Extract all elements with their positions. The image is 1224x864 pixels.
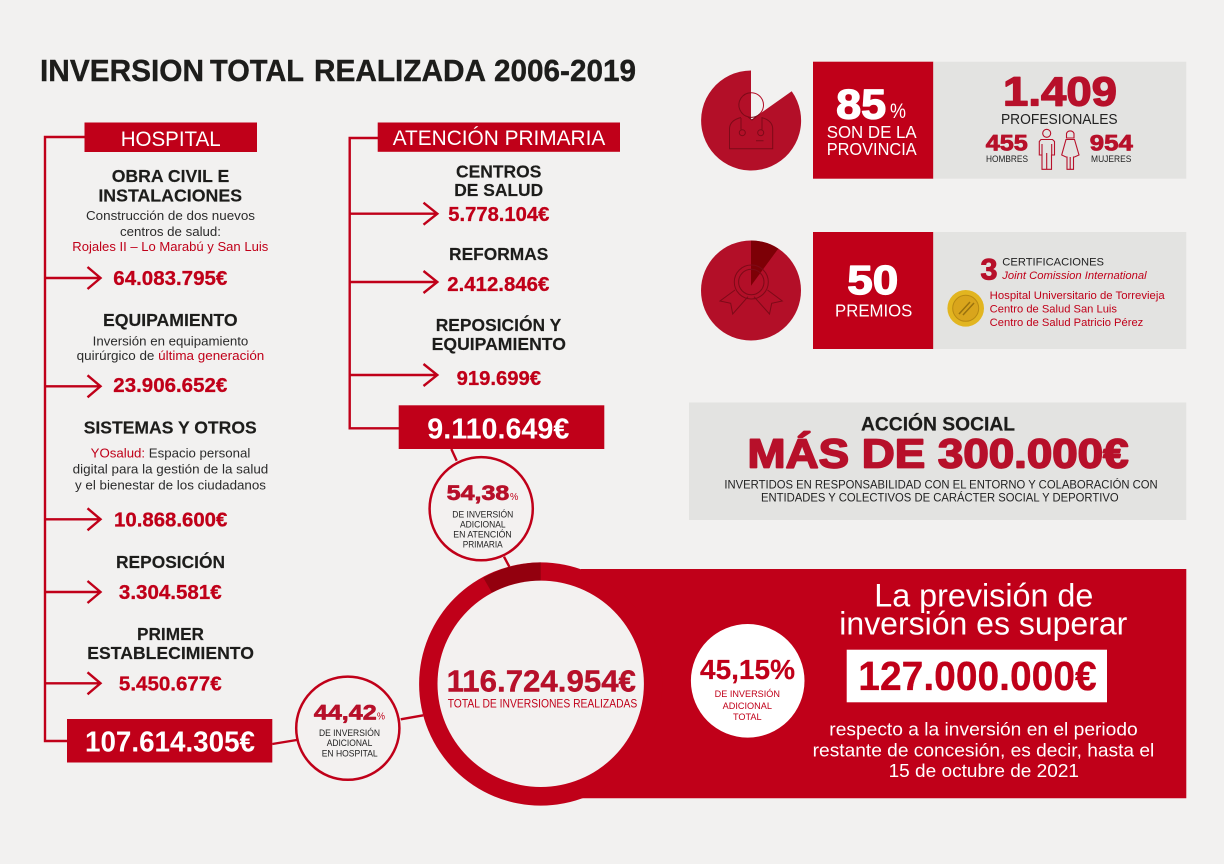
value: equipamiento: 23.906.652€ (113, 374, 228, 397)
85% box (813, 62, 933, 179)
hospital total: 107.614.305€ (85, 727, 255, 759)
callout: 54,38% atención primaria: PRIMARIA (463, 539, 503, 549)
total value: TOTAL DE INVERSIONES REALIZADAS (448, 698, 638, 710)
text: obra civil: centros de salud: (120, 224, 221, 239)
title: INVERSION (40, 53, 204, 88)
hospital heading (84, 122, 257, 152)
total value: 116.724.954€ (447, 664, 636, 699)
title (40, 53, 636, 88)
panel: acción social (689, 402, 1186, 520)
text: reposición: REPOSICIÓN (116, 551, 225, 572)
85% box: PROVINCIA (827, 139, 917, 159)
text: primer establecimiento: ESTABLECIMIENTO (87, 643, 254, 663)
callout: 44,42% hospital: ADICIONAL (327, 738, 372, 748)
panel: atención primaria (350, 122, 620, 449)
text: sistemas y otros: digital para la gestión de la salud (73, 461, 268, 476)
text: sistemas y otros (73, 417, 268, 492)
text: centros de salud: DE SALUD (454, 180, 543, 200)
hospital connector line (45, 137, 85, 741)
text: primer establecimiento: PRIMER (137, 624, 204, 644)
hospital total (67, 719, 272, 762)
arrow: obra civil (45, 267, 100, 289)
forecast note: restante de concesión, es decir, hasta el (813, 740, 1154, 761)
certificaciones box: CERTIFICACIONES (1002, 257, 1104, 269)
value: reformas: 2.412.846€ (447, 273, 550, 296)
text: reposición y equipamiento: EQUIPAMIENTO (432, 334, 566, 354)
value: obra civil: 64.083.795€ (113, 267, 228, 290)
callout: 44,42% hospital: 44,42 (314, 701, 377, 724)
85% box: % (890, 100, 906, 123)
title: TOTAL (210, 53, 304, 88)
title: 2006-2019 (494, 53, 636, 88)
panel: hospital (45, 122, 272, 762)
hospital heading: HOSPITAL (121, 127, 221, 151)
forecast heading: La previsión de (874, 578, 1093, 614)
text: sistemas y otros: SISTEMAS Y OTROS (84, 417, 257, 437)
forecast note: 15 de octubre de 2021 (889, 760, 1079, 781)
text: sistemas y otros: YOsalud: Espacio personal (91, 445, 250, 460)
callout: 45,15%: 45,15% (700, 654, 795, 685)
forecast heading (839, 578, 1128, 641)
callout: 44,42% hospital (272, 677, 423, 780)
arrow: reformas (350, 271, 437, 293)
certificaciones box: Hospital Universitario de Torrevieja (990, 290, 1166, 302)
certificaciones box: Centro de Salud San Luis (990, 303, 1117, 315)
panel: acción social: ENTIDADES Y COLECTIVOS DE CARÁCTER SOCIAL Y DEPORTIVO (761, 490, 1119, 505)
arrow: reposición y equipamiento (350, 364, 437, 386)
forecast heading: inversión es superar (839, 605, 1128, 641)
certificaciones box: Centro de Salud Patricio Pérez (990, 317, 1143, 329)
certificaciones box: Joint Comission International (1001, 270, 1147, 282)
text: sistemas y otros: y el bienestar de los ciudadanos (75, 477, 266, 492)
certificaciones box (933, 232, 1186, 349)
85% box: 85 (836, 80, 886, 127)
certificaciones box: 3 (980, 253, 998, 286)
arrow: reposición (45, 581, 100, 603)
1.409 profesionales box: 455 (986, 131, 1028, 156)
panel: acción social: INVERTIDOS EN RESPONSABILIDAD CON EL ENTORNO Y COLABORACIÓN CON (724, 476, 1158, 491)
callout: 44,42% hospital: EN HOSPITAL (322, 749, 378, 759)
50 premios box: 50 (847, 257, 898, 303)
arrow: centros de salud (350, 203, 437, 225)
callout: 45,15% (691, 624, 804, 738)
forecast note (813, 719, 1154, 781)
value: primer establecimiento: 5.450.677€ (119, 672, 222, 696)
callout: 44,42% hospital: DE INVERSIÓN (319, 728, 380, 738)
total ring (419, 562, 662, 806)
1.409 profesionales box (933, 62, 1186, 179)
title: REALIZADA (314, 53, 486, 88)
value: reposición: 3.304.581€ (119, 581, 222, 604)
callout: 44,42% hospital: % (377, 710, 385, 722)
text: obra civil: Construcción de dos nuevos (86, 208, 255, 223)
value: reposición y equipamiento: 919.699€ (457, 367, 542, 390)
callout: 45,15%: TOTAL (733, 712, 762, 723)
text: equipamiento (77, 310, 264, 363)
text: obra civil: OBRA CIVIL E (112, 166, 229, 186)
callout: 54,38% atención primaria: ADICIONAL (460, 519, 506, 529)
icon: medal (720, 265, 782, 314)
callout: 45,15%: DE INVERSIÓN (715, 689, 780, 700)
panel: acción social: MÁS DE 300.000€ (748, 430, 1129, 476)
1.409 profesionales box: PROFESIONALES (1001, 112, 1118, 128)
text: obra civil: Rojales II – Lo Marabú y San Luis (72, 239, 269, 254)
atención primaria heading: ATENCIÓN PRIMARIA (393, 125, 606, 150)
arrow: equipamiento (45, 375, 100, 397)
text: primer establecimiento (87, 624, 254, 663)
50 premios box (813, 232, 933, 349)
callout: 54,38% atención primaria: EN ATENCIÓN (453, 529, 512, 539)
panel: previsión de inversión (419, 562, 1186, 806)
atención primaria total: 9.110.649€ (427, 413, 569, 445)
arrow: primer establecimiento (45, 672, 100, 694)
50 premios box: PREMIOS (835, 301, 912, 321)
icon: doctor (730, 93, 773, 149)
text: equipamiento: quirúrgico de última generación (77, 348, 264, 363)
text: centros de salud (454, 162, 543, 200)
callout: 45,15%: ADICIONAL (723, 701, 772, 712)
atención primaria connector line (350, 138, 399, 428)
85% box: SON DE LA (827, 122, 917, 142)
forecast note: respecto a la inversión en el periodo (829, 719, 1138, 740)
panel: profesionales (701, 62, 1186, 179)
1.409 profesionales box: 954 (1090, 131, 1134, 156)
text: reformas: REFORMAS (449, 244, 549, 264)
icon: gold seal (947, 290, 984, 327)
value: centros de salud: 5.778.104€ (448, 203, 550, 226)
1.409 profesionales box: HOMBRES (986, 154, 1028, 164)
callout: 54,38% atención primaria (430, 449, 533, 567)
icon: man (1039, 129, 1054, 169)
text: reposición y equipamiento (432, 314, 566, 354)
1.409 profesionales box: 1.409 (1003, 69, 1117, 115)
1.409 profesionales box: MUJERES (1091, 154, 1131, 164)
callout: 54,38% atención primaria: DE INVERSIÓN (452, 509, 513, 519)
text: reposición y equipamiento: REPOSICIÓN Y (436, 314, 561, 335)
atención primaria total (399, 405, 604, 449)
panel: acción social: ACCIÓN SOCIAL (861, 412, 1015, 436)
text: equipamiento: Inversión en equipamiento (93, 333, 248, 348)
callout: 54,38% atención primaria: % (510, 491, 518, 503)
icon: woman (1062, 131, 1079, 169)
callout: 54,38% atención primaria: 54,38 (447, 482, 510, 505)
text: obra civil (72, 166, 269, 254)
red band (578, 569, 1186, 798)
panel: premios (701, 232, 1186, 349)
text: obra civil: INSTALACIONES (98, 185, 242, 205)
text: equipamiento: EQUIPAMIENTO (103, 310, 238, 330)
arrow: sistemas y otros (45, 508, 100, 530)
pie chart 85% with doctor icon (701, 70, 801, 170)
forecast value: 127.000.000€ (858, 653, 1097, 699)
value: sistemas y otros: 10.868.600€ (114, 508, 228, 532)
text: centros de salud: CENTROS (456, 162, 542, 182)
pie chart with medal icon (701, 240, 801, 340)
